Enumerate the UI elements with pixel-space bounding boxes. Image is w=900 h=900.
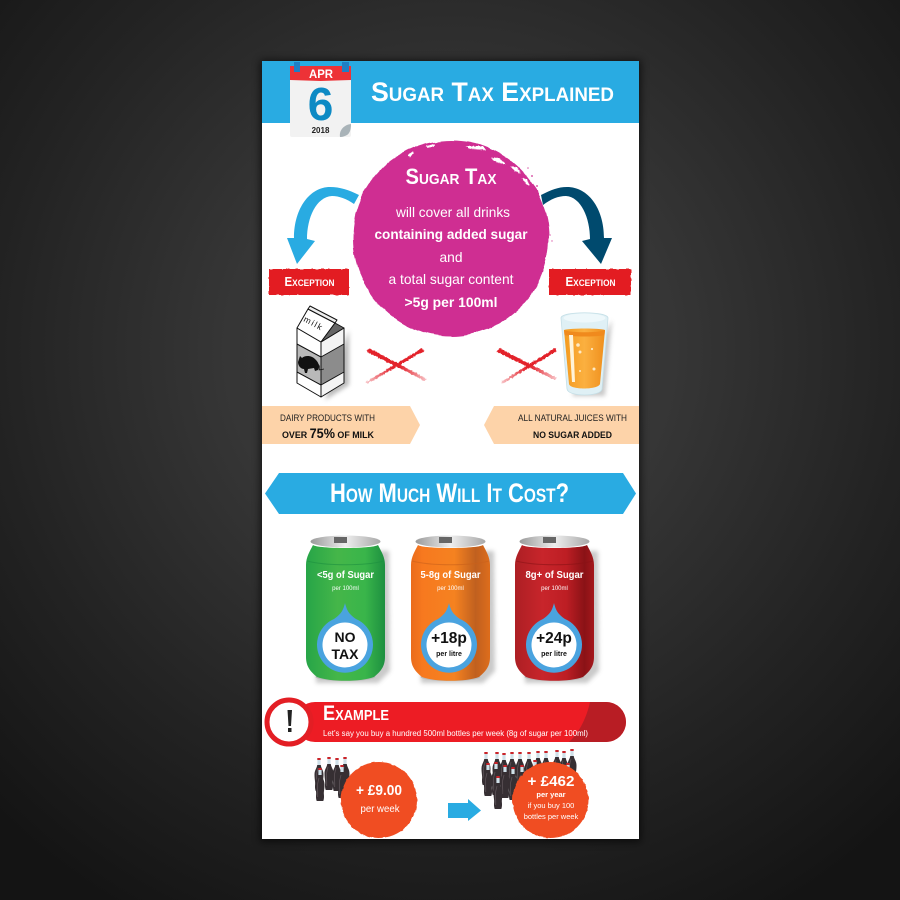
panel: juice exception note: NO SUGAR ADDED [533, 430, 612, 441]
callout: no tax [317, 603, 373, 673]
panel: juice exception note: ALL NATURAL JUICES WITH [518, 413, 627, 423]
callout: per week cost: per week [360, 803, 400, 815]
callout: per week cost [341, 762, 417, 838]
text: description: will cover all drinks [395, 204, 510, 220]
can: red 24p: 8g+ of Sugar [526, 569, 584, 581]
callout: 24p: per litre [541, 651, 567, 658]
icon: exclamation [267, 700, 311, 744]
bottles: left group [314, 757, 350, 801]
icon: juice glass [561, 313, 612, 396]
panel: sugar tax circle [353, 140, 553, 336]
callout: 18p [421, 603, 477, 673]
callout: per year cost: if you buy 100 [528, 801, 574, 810]
callout: per year cost: + £462 [528, 774, 574, 790]
callout: 18p: per litre [436, 651, 462, 658]
heading: how much will it cost [265, 473, 636, 514]
text: description: >5g per 100ml [404, 294, 498, 310]
panel: juice exception note [484, 406, 639, 444]
heading: sugar tax: Sugar Tax [406, 164, 496, 189]
icon: milk carton: milk [302, 314, 325, 333]
title: Sugar Tax Explained [371, 77, 614, 107]
icon: left red cross [366, 348, 427, 384]
can: orange 18p: 5-8g of Sugar [420, 569, 480, 581]
panel: dairy exception note: OVER 75% OF MILK [282, 426, 374, 441]
callout: 24p: +24p [536, 630, 572, 647]
icon: calendar: APR [309, 69, 334, 81]
callout: per year cost: per year [536, 790, 566, 799]
panel: example banner: Example [323, 702, 389, 725]
can: green no tax: <5g of Sugar [317, 569, 374, 581]
callout: per year cost [512, 762, 588, 838]
text: description [374, 204, 528, 310]
panel: dairy exception note [262, 406, 420, 444]
arrow: blue right [448, 799, 481, 821]
label: right exception [549, 269, 631, 295]
icon: calendar: 2018 [312, 126, 330, 135]
panel: dairy exception note: DAIRY PRODUCTS WITH [280, 413, 375, 423]
label: left exception: Exception [284, 275, 334, 289]
text: description: and [440, 249, 462, 265]
label: right exception: Exception [566, 275, 616, 289]
can: orange 18p [411, 536, 495, 683]
text: description: a total sugar content [388, 271, 514, 287]
panel: example banner [267, 700, 626, 744]
header band [262, 61, 639, 123]
heading: how much will it cost: How Much Will It Cost? [330, 478, 569, 508]
panel: example banner: Let’s say you buy a hundred 500ml bottles per week (8g of sugar per 100ml) [323, 729, 588, 738]
can: green no tax: per 100ml [332, 586, 359, 592]
callout: no tax: NO [334, 629, 356, 645]
callout: per year cost: bottles per week [524, 812, 579, 821]
icon: calendar: 6 [308, 78, 333, 130]
callout: per week cost: + £9.00 [356, 783, 402, 799]
bottles: right group [482, 749, 576, 809]
callout: 18p: +18p [431, 630, 467, 647]
panel: infographic page [262, 61, 639, 839]
can: orange 18p: per 100ml [437, 586, 464, 592]
arrow: right curved [541, 187, 612, 264]
can: red 24p [515, 536, 599, 683]
can: red 24p: per 100ml [541, 586, 568, 592]
label: left exception [269, 269, 349, 295]
icon: calendar [290, 62, 351, 137]
can: green no tax [306, 536, 390, 683]
icon: right red cross [497, 348, 557, 384]
callout: 24p [526, 603, 582, 673]
text: description: containing added sugar [374, 226, 528, 242]
icon: milk carton [297, 306, 349, 400]
callout: no tax: TAX [332, 646, 359, 662]
arrow: left curved [287, 187, 359, 264]
